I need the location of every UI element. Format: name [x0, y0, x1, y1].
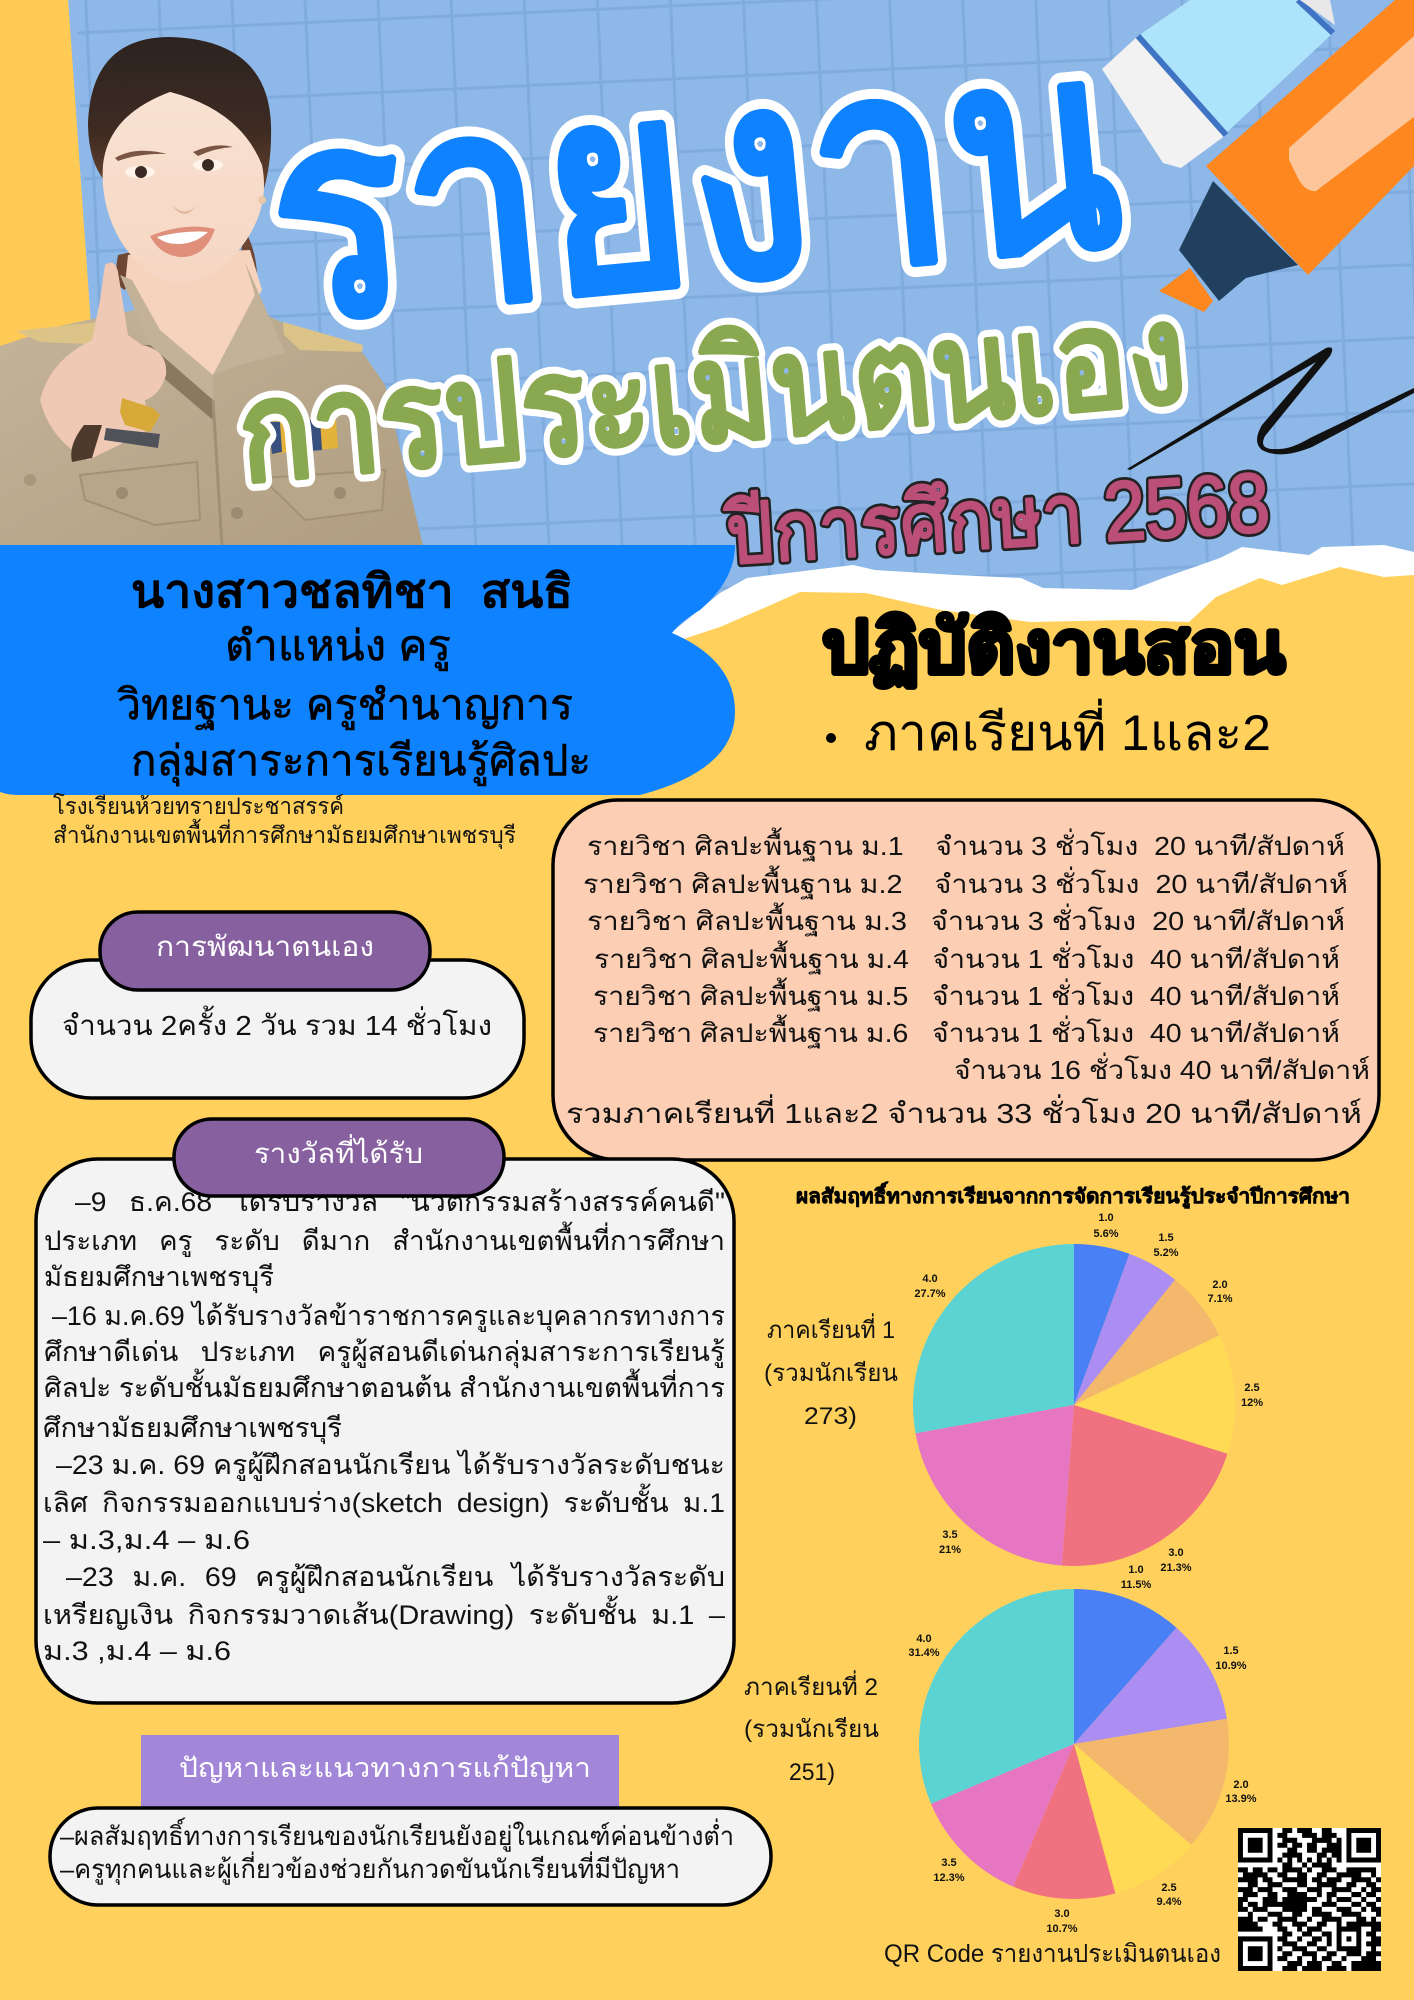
awards body text: มัธยมศึกษาเพชรบุรี	[44, 1262, 274, 1294]
panel: teaching schedule: จำนวน 16 ชั่วโมง 40 นาที/สัปดาห์	[954, 1052, 1370, 1085]
pie labels: semester 1: 21.3%	[1160, 1562, 1192, 1574]
self development body: จำนวน 2ครั้ง 2 วัน รวม 14 ชั่วโมง	[62, 1005, 492, 1041]
panel: teaching schedule: รายวิชา ศิลปะพื้นฐาน ม.2 จำนวน 3 ชั่วโมง 20 นาที/สัปดาห์	[583, 865, 1348, 900]
awards body text: ประเภท ครู ระดับ ดีมาก สำนักงานเขตพื้นที่การศึกษา	[44, 1221, 725, 1257]
subtitle: การประเมินตนเอง: การประเมินตนเอง	[232, 274, 1192, 512]
pie chart: semester 2	[919, 1589, 1229, 1899]
icon: black scribble	[1127, 347, 1414, 470]
school and office text: สำนักงานเขตพื้นที่การศึกษามัธยมศึกษาเพชรบุรี	[53, 819, 516, 849]
awards body text: ศึกษาดีเด่น ประเภท ครูผู้สอนดีเด่นกลุ่มสาระการเรียนรู้	[44, 1337, 725, 1369]
pie labels: semester 1: 5.6%	[1093, 1228, 1119, 1240]
pie labels: semester 1: 7.1%	[1207, 1293, 1233, 1305]
pie labels: semester 2: 10.9%	[1215, 1660, 1247, 1672]
pie labels: semester 1: 2.5	[1244, 1382, 1260, 1394]
pie labels: semester 1: 1.0	[1098, 1212, 1114, 1224]
pie labels: semester 2: 12.3%	[933, 1872, 965, 1884]
pie labels: semester 2: 3.0	[1054, 1908, 1070, 1920]
panel: teaching schedule: รายวิชา ศิลปะพื้นฐาน ม.1 จำนวน 3 ชั่วโมง 20 นาที/สัปดาห์	[587, 827, 1345, 862]
pie labels: semester 2: 2.0	[1233, 1779, 1249, 1791]
awards body text: –9 ธ.ค.68 ได้รับรางวัล "นวัตกรรมสร้างสรรค์คนดี"	[75, 1186, 725, 1217]
QR caption: QR Code รายงานประเมินตนเอง	[884, 1940, 1221, 1968]
pie labels: semester 1: 5.2%	[1153, 1247, 1179, 1259]
pie labels: semester 2: 1.0	[1128, 1564, 1144, 1576]
pie labels: semester 2: 9.4%	[1156, 1896, 1182, 1908]
teacher rank: วิทยฐานะ ครูชำนาญการ	[117, 681, 573, 730]
panel: teaching schedule: รายวิชา ศิลปะพื้นฐาน ม.6 จำนวน 1 ชั่วโมง 40 นาที/สัปดาห์	[593, 1014, 1340, 1049]
panel: problems and solutions: –ผลสัมฤทธิ์ทางการเรียนของนักเรียนยังอยู่ในเกณฑ์ค่อนข้างต่ำ	[60, 1817, 734, 1852]
pie labels: semester 1: 3.0	[1168, 1547, 1184, 1559]
panel: problems and solutions: –ครูทุกคนและผู้เกี่ยวข้องช่วยกันกวดขันนักเรียนที่มีปัญหา	[60, 1851, 680, 1885]
heading: teaching duty: ปฏิบัติงานสอน	[822, 608, 1285, 688]
awards body text: –23 ม.ค. 69 ครูผู้ฝึกสอนนักเรียน ได้รับรางวัลระดับ	[66, 1562, 725, 1593]
semester 1 label: (รวมนักเรียน	[764, 1360, 898, 1387]
panel: teaching schedule: รวมภาคเรียนที่ 1และ2 จำนวน 33 ชั่วโมง 20 นาที/สัปดาห์	[566, 1094, 1362, 1129]
pill: awards heading: รางวัลที่ได้รับ	[254, 1134, 423, 1169]
pill: self development heading: การพัฒนาตนเอง	[156, 931, 374, 962]
awards body text: เลิศ กิจกรรมออกแบบร่าง(sketch design) ระดับชั้น ม.1	[43, 1483, 725, 1518]
panel: awards	[36, 1119, 734, 1703]
icon: highlighter pen	[1102, 0, 1414, 312]
school and office text	[53, 793, 516, 849]
awards body text: เหรียญเงิน กิจกรรมวาดเส้น(Drawing) ระดับชั้น ม.1 –	[43, 1595, 725, 1630]
semester 2 label: 251)	[789, 1759, 835, 1786]
pie labels: semester 1: 21%	[939, 1544, 961, 1556]
chart title: ผลสัมฤทธิ์ทางการเรียนจากการจัดการเรียนรู้ประจำปีการศึกษา	[796, 1181, 1350, 1209]
panel: teaching schedule: รายวิชา ศิลปะพื้นฐาน ม.3 จำนวน 3 ชั่วโมง 20 นาที/สัปดาห์	[587, 902, 1345, 937]
pie labels: semester 2: 11.5%	[1121, 1579, 1152, 1591]
QR code	[1238, 1828, 1381, 1971]
pie labels: semester 1: 12%	[1241, 1397, 1263, 1409]
awards body text: –23 ม.ค. 69 ครูผู้ฝึกสอนนักเรียน ได้รับรางวัลระดับชนะ	[56, 1450, 725, 1481]
panel: teaching schedule: รายวิชา ศิลปะพื้นฐาน ม.4 จำนวน 1 ชั่วโมง 40 นาที/สัปดาห์	[594, 940, 1340, 975]
awards body text: ศิลปะ ระดับชั้นมัธยมศึกษาตอนต้น สำนักงานเขตพื้นที่การ	[44, 1368, 725, 1403]
pie labels: semester 2: 2.5	[1161, 1882, 1177, 1894]
panel: teaching schedule: รายวิชา ศิลปะพื้นฐาน ม.5 จำนวน 1 ชั่วโมง 40 นาที/สัปดาห์	[593, 977, 1340, 1012]
pie labels: semester 2: 1.5	[1223, 1645, 1239, 1657]
panel: teaching schedule	[553, 800, 1379, 1160]
semester 1 label	[764, 1313, 898, 1430]
semester 2 label: (รวมนักเรียน	[744, 1716, 879, 1743]
awards body text: ศึกษามัธยมศึกษาเพชรบุรี	[43, 1413, 342, 1445]
panel: problems and solutions	[50, 1808, 771, 1905]
pie labels: semester 1: 3.5	[942, 1529, 958, 1541]
semester 2 label: ภาคเรียนที่ 2	[744, 1670, 878, 1701]
awards body text: ม.3 ,ม.4 – ม.6	[43, 1636, 231, 1666]
pie labels: semester 1: 27.7%	[914, 1288, 946, 1300]
semester 2 label	[744, 1670, 879, 1786]
panel: problems and solutions heading	[141, 1735, 619, 1809]
header background: blue grid paper	[68, 0, 1414, 631]
pie labels: semester 2	[908, 1564, 1257, 1935]
awards body text: – ม.3,ม.4 – ม.6	[43, 1525, 250, 1555]
photo: teacher in uniform pointing	[0, 37, 423, 546]
bullet: semesters: ภาคเรียนที่ 1และ2	[864, 699, 1271, 761]
semester 1 label: 273)	[804, 1403, 857, 1430]
pie labels: semester 2: 31.4%	[908, 1647, 940, 1659]
academic year heading: ปีการศึกษา 2568	[722, 455, 1272, 582]
pie labels: semester 1: 4.0	[922, 1273, 938, 1285]
pill: awards heading	[174, 1119, 504, 1196]
pill: self development heading	[100, 912, 430, 990]
torn paper edge	[650, 545, 1414, 760]
school and office text: โรงเรียนห้วยทรายประชาสรรค์	[53, 793, 344, 819]
semester 1 label: ภาคเรียนที่ 1	[767, 1313, 895, 1344]
subtitle: การประเมินตนเอง: การประเมินตนเอง	[232, 274, 1192, 512]
learning area: กลุ่มสาระการเรียนรู้ศิลปะ	[131, 737, 591, 787]
pie labels: semester 1: 1.5	[1158, 1232, 1174, 1244]
pie labels: semester 2: 10.7%	[1046, 1923, 1078, 1935]
teacher name: นางสาวชลทิชา สนธิ	[131, 565, 573, 617]
panel: self development	[31, 912, 524, 1098]
panel: teacher identity	[0, 545, 735, 795]
yellow corner at left of header	[0, 0, 92, 346]
awards body text: –16 ม.ค.69 ได้รับรางวัลข้าราชการครูและบุคลากรทางการ	[52, 1301, 725, 1333]
pie chart: semester 1	[913, 1244, 1235, 1566]
pie labels: semester 2: 4.0	[916, 1633, 932, 1645]
pie labels: semester 1: 2.0	[1212, 1279, 1228, 1291]
pie labels: semester 2: 13.9%	[1225, 1793, 1257, 1805]
teacher position: ตำแหน่ง ครู	[225, 622, 451, 671]
pie labels: semester 1	[914, 1212, 1263, 1574]
panel: problems and solutions heading: ปัญหาและแนวทางการแก้ปัญหา	[179, 1753, 591, 1783]
pie labels: semester 2: 3.5	[941, 1857, 957, 1869]
academic year heading: ปีการศึกษา 2568	[722, 455, 1272, 582]
awards body text	[43, 1186, 725, 1666]
